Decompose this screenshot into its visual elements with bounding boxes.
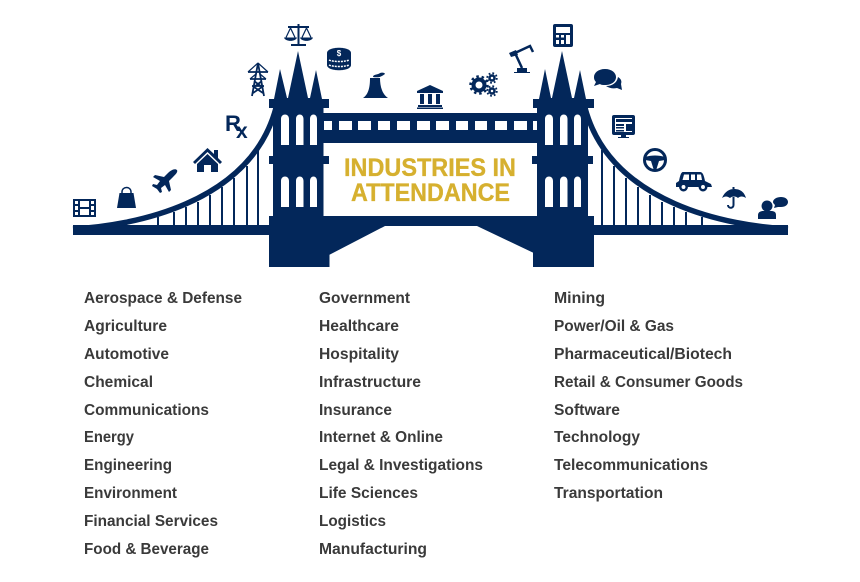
left suspension deck <box>73 225 273 235</box>
title <box>344 154 516 207</box>
industry list: column 3: Telecommunications <box>554 457 708 474</box>
industry list: column 2: Legal & Investigations <box>319 457 483 474</box>
industry list: column 3: Pharmaceutical/Biotech <box>554 346 732 363</box>
industry list: column 3: Technology <box>554 429 640 446</box>
industry list: column 1 <box>84 290 242 558</box>
left suspension cable <box>73 108 276 229</box>
upper walkway with windows <box>323 113 538 143</box>
industry list: column 1: Financial Services <box>84 513 218 530</box>
industry list: column 2: Hospitality <box>319 346 399 363</box>
icon: power pylon <box>248 63 268 96</box>
icon: gears <box>470 73 497 96</box>
industry list: column 2: Internet & Online <box>319 429 443 446</box>
icon: film strip <box>73 199 96 217</box>
left hangers <box>158 150 258 226</box>
icon: shopping bag <box>117 188 136 208</box>
industry list: column 1: Environment <box>84 485 178 502</box>
industry list: column 2 <box>319 290 483 558</box>
industry list: column 2: Government <box>319 290 411 307</box>
industry list: column 1: Communications <box>84 402 209 419</box>
icon: steering wheel <box>644 150 666 170</box>
title: INDUSTRIES IN <box>344 154 516 182</box>
icon: scales of justice <box>284 24 313 45</box>
icon: coin stack <box>327 48 351 70</box>
icon: umbrella <box>722 187 746 208</box>
icon: prescription Rx: R <box>225 111 241 136</box>
icon: prescription Rx <box>225 111 248 143</box>
icon: coin stack: $ <box>337 49 342 58</box>
right suspension cable <box>585 108 788 229</box>
industry list: column 2: Life Sciences <box>319 485 418 502</box>
icon: prescription Rx: x <box>236 120 248 143</box>
right tower <box>532 51 594 267</box>
icon: bank building <box>417 85 443 109</box>
industry list: column 1: Engineering <box>84 457 172 474</box>
icon: house <box>193 148 222 172</box>
industry list: column 2: Infrastructure <box>319 374 421 391</box>
industry list: column 3: Transportation <box>554 485 663 502</box>
right hangers <box>602 150 702 226</box>
industry list: column 1: Energy <box>84 429 134 446</box>
industry list: column 2: Insurance <box>319 402 392 419</box>
industry list: column 3: Retail & Consumer Goods <box>554 374 743 391</box>
industry list: column 1: Automotive <box>84 346 169 363</box>
icon: person with speech bubble <box>758 197 788 219</box>
industry list: column 2: Logistics <box>319 513 386 530</box>
industry list: column 2: Healthcare <box>319 318 399 335</box>
icon: robot arm <box>509 46 533 73</box>
industry list: column 3 <box>554 290 743 502</box>
bridge illustration <box>73 51 788 267</box>
icon: airplane <box>152 169 177 193</box>
title: ATTENDANCE <box>351 179 510 207</box>
industry list: column 3: Software <box>554 402 620 419</box>
icon: factory chimney <box>363 73 388 98</box>
icon: speech bubbles <box>594 69 622 90</box>
left tower <box>269 51 330 267</box>
icon: computer monitor <box>612 115 635 138</box>
industry list: column 1: Agriculture <box>84 318 167 335</box>
icon: car <box>676 172 712 190</box>
industry list: column 1: Chemical <box>84 374 153 391</box>
icon: calculator <box>553 24 573 47</box>
lower deck with angled supports <box>323 216 538 255</box>
industry list: column 3: Mining <box>554 290 605 307</box>
industry list: column 3: Power/Oil & Gas <box>554 318 674 335</box>
industry list: column 1: Food & Beverage <box>84 541 209 558</box>
industry list: column 1: Aerospace & Defense <box>84 290 242 307</box>
industry list: column 2: Manufacturing <box>319 541 427 558</box>
right suspension deck <box>588 225 788 235</box>
